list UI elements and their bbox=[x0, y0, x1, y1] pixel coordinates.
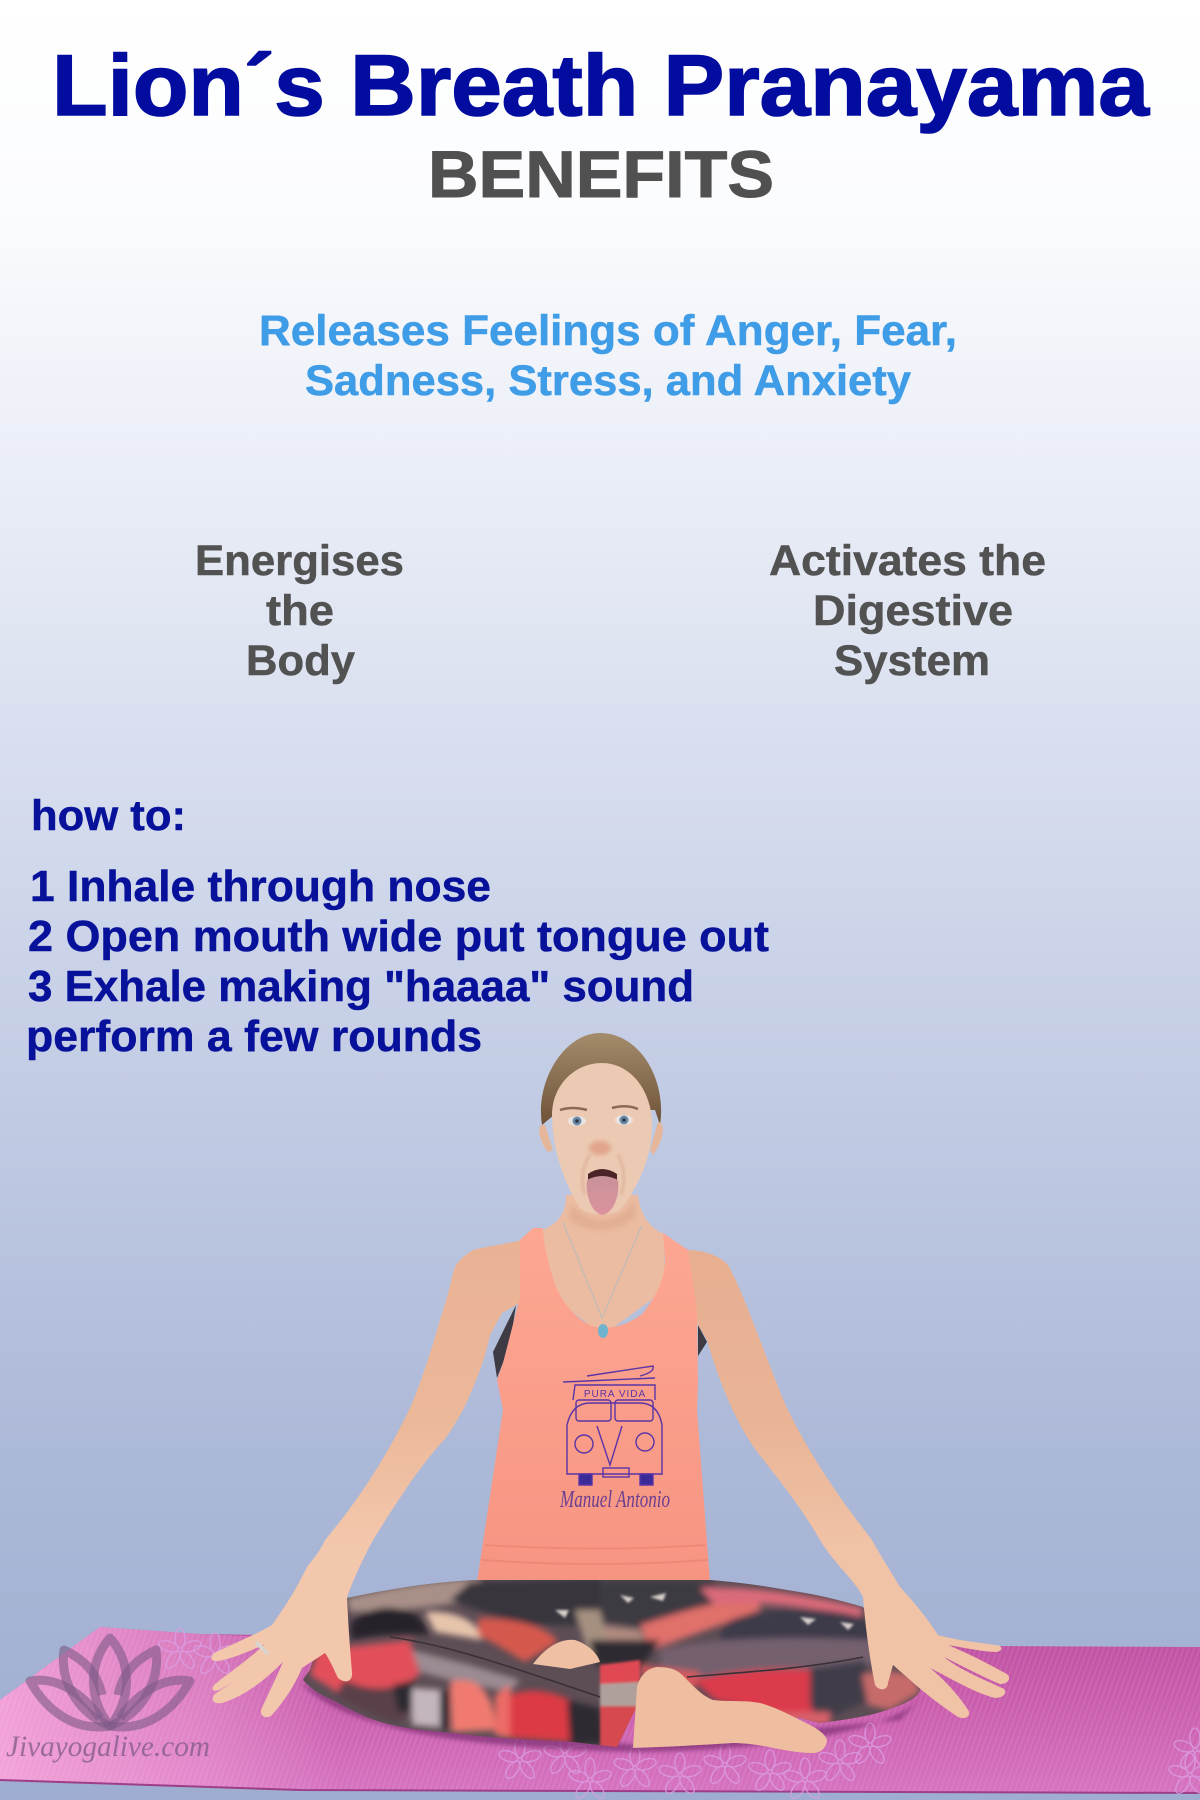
left hand bbox=[211, 1540, 373, 1717]
right hand bbox=[820, 1540, 1009, 1718]
benefit: activates the digestive system: Digestive bbox=[813, 587, 1013, 635]
shirt text: Manuel Antonio: Manuel Antonio bbox=[559, 1487, 670, 1513]
tank top bbox=[477, 1228, 710, 1582]
how to steps: perform a few rounds bbox=[26, 1012, 482, 1061]
benefit: activates the digestive system: Activates the bbox=[769, 537, 1046, 585]
logo text: Jivayogalive.com bbox=[6, 1730, 210, 1763]
right arm bbox=[686, 1250, 872, 1540]
ankle cuff bbox=[600, 1660, 640, 1750]
eyes bbox=[568, 1115, 633, 1126]
yoga mat bbox=[0, 1627, 1200, 1800]
mat shadow bbox=[300, 1682, 925, 1752]
leggings bbox=[303, 1580, 920, 1747]
benefit: activates the digestive system bbox=[769, 537, 1046, 685]
shirt text: PURA VIDA: PURA VIDA bbox=[584, 1389, 646, 1400]
tank bottom ribs bbox=[482, 1545, 707, 1564]
hair bbox=[541, 1033, 661, 1125]
left arm bbox=[325, 1240, 525, 1540]
benefit: energises the body: Energises bbox=[195, 537, 404, 585]
mouth bbox=[588, 1169, 617, 1182]
how to steps: 3 Exhale making "haaaa" sound bbox=[28, 962, 694, 1011]
logo: lotus watermark bbox=[30, 1638, 190, 1727]
benefit: releases feelings: Releases Feelings of Anger, Fear, bbox=[259, 307, 957, 355]
ears bbox=[539, 1122, 663, 1155]
subtitle: BENEFITS bbox=[428, 137, 774, 211]
legging seams bbox=[390, 1637, 863, 1697]
nose bbox=[589, 1141, 611, 1155]
necklace bbox=[563, 1222, 642, 1318]
ring bbox=[256, 1642, 268, 1654]
how to steps bbox=[26, 862, 769, 1061]
tongue bbox=[587, 1176, 618, 1215]
shirt van print bbox=[563, 1366, 662, 1485]
how to steps: 2 Open mouth wide put tongue out bbox=[28, 912, 769, 961]
benefit: releases feelings bbox=[259, 307, 957, 405]
under foot bbox=[533, 1640, 600, 1669]
face bbox=[552, 1063, 652, 1214]
benefit: energises the body: the bbox=[266, 587, 334, 635]
benefit: energises the body: Body bbox=[246, 637, 355, 685]
benefit: energises the body bbox=[195, 537, 404, 685]
neck and chest bbox=[543, 1195, 665, 1335]
sports bra bbox=[493, 1305, 707, 1378]
main foot bbox=[633, 1667, 827, 1753]
benefit: activates the digestive system: System bbox=[834, 637, 990, 685]
cheek shading bbox=[583, 1155, 624, 1195]
pendant bbox=[598, 1324, 608, 1338]
how to heading: how to: bbox=[31, 792, 186, 840]
white flecks bbox=[555, 1593, 854, 1630]
woman in lion's breath pose bbox=[211, 1033, 1009, 1755]
benefit: releases feelings: Sadness, Stress, and Anxiety bbox=[305, 357, 911, 405]
title: Lion´s Breath Pranayama bbox=[52, 38, 1150, 134]
neck shadow bbox=[568, 1200, 636, 1230]
mat flower pattern bbox=[158, 1628, 1200, 1800]
how to steps: 1 Inhale through nose bbox=[30, 862, 491, 911]
eyebrows bbox=[560, 1106, 638, 1110]
